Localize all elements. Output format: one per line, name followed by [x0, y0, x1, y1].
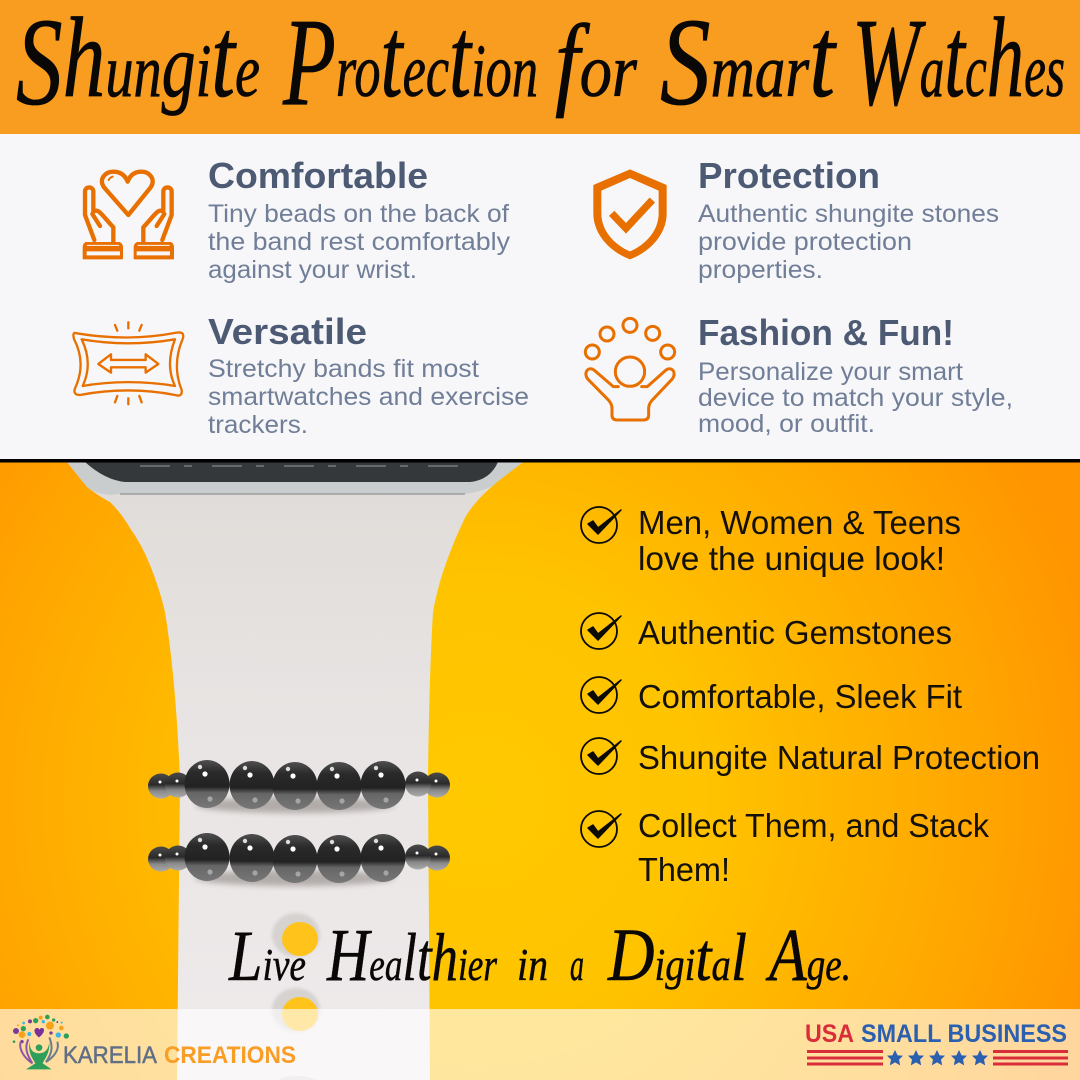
check item: Authentic Gemstones: Authentic Gemstones — [638, 614, 952, 651]
description: Authentic shungite stones — [698, 200, 999, 228]
check item: Men, Women & Teens: Men, Women & Teens — [638, 504, 961, 541]
feature: Comfortable — [83, 155, 511, 284]
description: Stretchy bands fit most — [208, 355, 479, 383]
description — [208, 200, 511, 284]
shungite bead bracelets — [148, 760, 450, 886]
feature: Versatile — [73, 311, 529, 439]
tagline: in — [517, 940, 548, 990]
badge text: USA — [805, 1020, 854, 1048]
check item: Men, Women & Teens — [581, 504, 961, 577]
divider line — [0, 459, 1080, 462]
logo: Karelia Creations — [13, 1015, 296, 1069]
band holes — [271, 913, 323, 1080]
feature: Protection — [593, 155, 999, 284]
tagline: Healthier — [326, 913, 497, 997]
check item: Collect Them, and Stack Them: Them! — [638, 851, 730, 888]
title: ro — [336, 29, 381, 113]
feature: Fashion & Fun — [585, 312, 1013, 438]
badge stripes and stars — [807, 1050, 1068, 1065]
description — [698, 358, 1013, 438]
watch band — [67, 462, 523, 1080]
heading: Comfortable — [208, 155, 428, 196]
description: mood, or outfit. — [698, 410, 875, 438]
check item: Collect Them, and Stack Them — [581, 807, 989, 888]
icon: person juggling — [585, 318, 675, 420]
heading: Protection — [698, 155, 880, 196]
description — [208, 355, 529, 439]
footer strip — [0, 1009, 1080, 1080]
description: Tiny beads on the back of — [208, 200, 509, 228]
description: smartwatches and exercise — [208, 383, 529, 411]
logo wordmark: KARELIA — [63, 1042, 157, 1069]
tagline: a — [570, 940, 584, 990]
check item: Shungite Natural Protection: Shungite Natural Protection — [638, 739, 1040, 776]
icon: hands holding heart — [83, 172, 173, 259]
title: a — [920, 29, 944, 113]
check item: Collect Them, and Stack Them: Collect Them, and Stack — [638, 807, 989, 844]
checklist — [581, 504, 1040, 888]
title: mar — [711, 29, 810, 113]
logo: Karelia Creations: CREATIONS — [164, 1042, 296, 1069]
title — [16, 0, 1065, 132]
check item: Comfortable, Sleek Fit: Comfortable, Sleek Fit — [638, 678, 962, 715]
description: provide protection — [698, 228, 912, 256]
icon: shield with check — [593, 169, 667, 259]
description: device to match your style, — [698, 384, 1013, 412]
check item: Men, Women & Teens: love the unique look! — [638, 540, 945, 577]
tagline: Digital — [607, 913, 747, 997]
bracelet: lower — [148, 833, 450, 886]
title: for — [555, 4, 638, 120]
description: trackers. — [208, 411, 308, 439]
heading: Versatile — [208, 311, 367, 352]
tagline: Age. — [765, 913, 851, 997]
description: the band rest comfortably — [208, 228, 511, 256]
header band — [0, 0, 1080, 134]
icon: stretching band — [73, 322, 183, 404]
photo background — [0, 460, 1080, 1080]
description — [698, 200, 999, 284]
description: against your wrist. — [208, 256, 417, 284]
bracelet: upper — [148, 760, 450, 813]
features panel — [0, 134, 1080, 459]
description: properties. — [698, 256, 823, 284]
tagline: Live — [228, 916, 306, 997]
description: Personalize your smart — [698, 358, 963, 386]
heading: Fashion & Fun! — [698, 312, 954, 353]
badge: USA Small Business: SMALL BUSINESS — [861, 1020, 1067, 1048]
tagline — [228, 913, 851, 997]
logo mark: tree of dots and figures — [13, 1015, 69, 1069]
badge: USA Small Business — [805, 1020, 1068, 1065]
